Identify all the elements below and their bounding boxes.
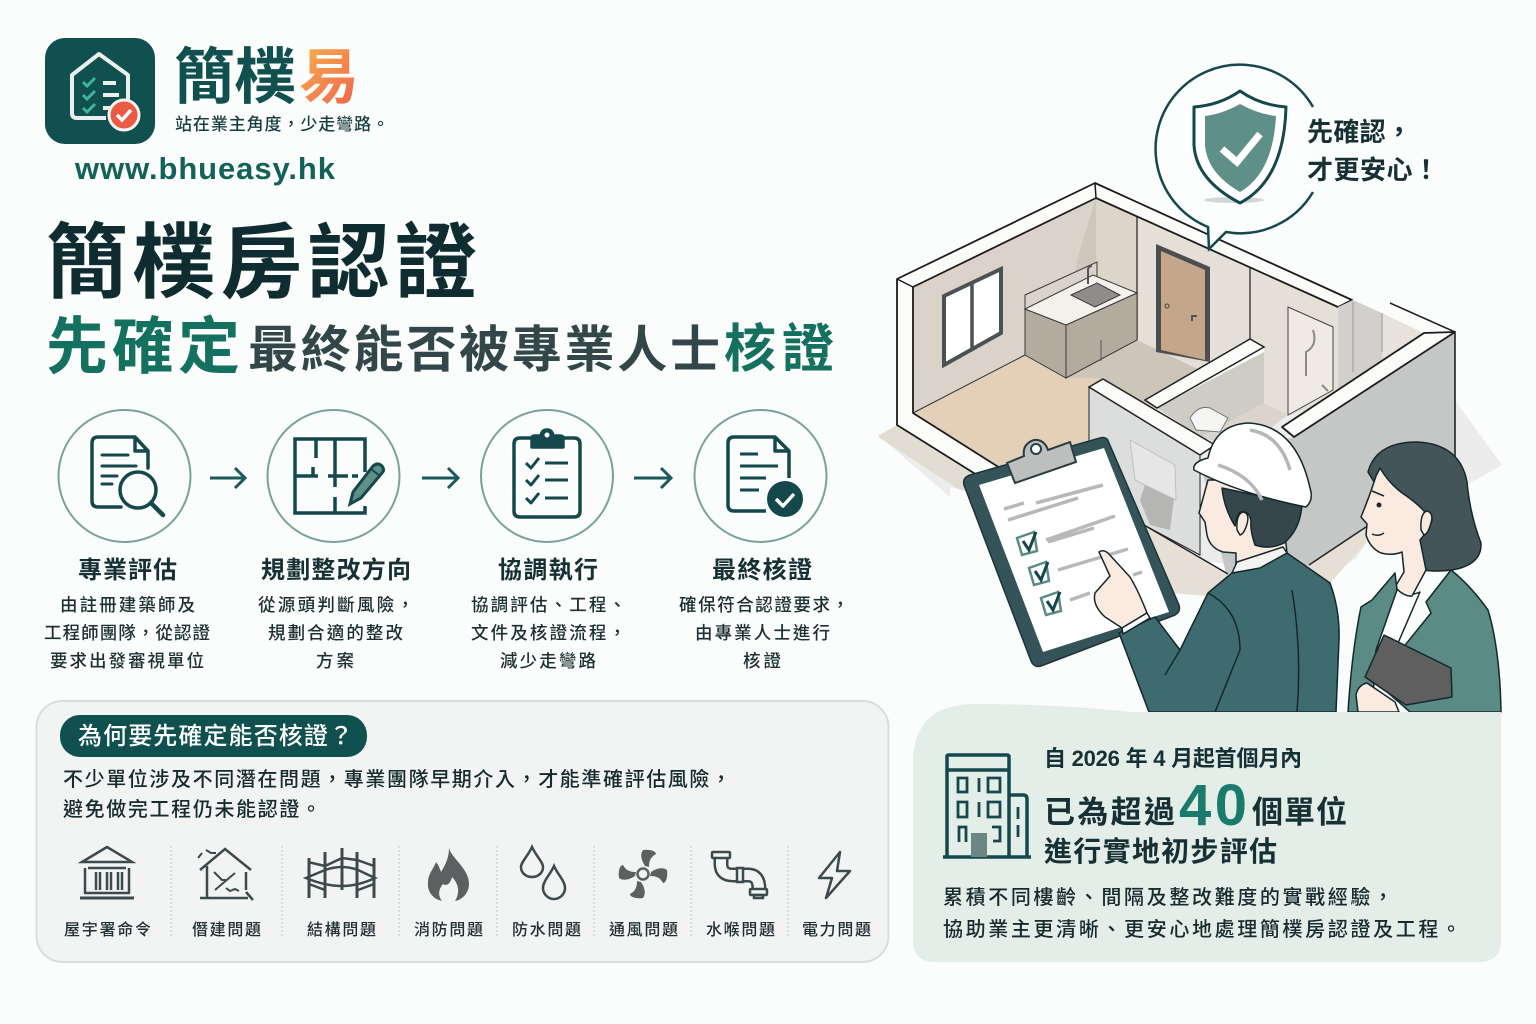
stat lead line: 自 2026 年 4 月起首個月內 <box>1044 746 1302 771</box>
step description: 方案 <box>316 651 354 671</box>
subtitle <box>46 313 834 382</box>
issue: fire <box>414 848 483 939</box>
bathroom partition wall <box>1145 339 1288 450</box>
icon: document with magnifier <box>58 410 190 542</box>
bathroom shower panel <box>1288 307 1333 415</box>
issue: plumbing <box>706 852 775 939</box>
stat headline: 已為超過 <box>1044 795 1175 830</box>
issue: structural <box>306 848 376 939</box>
wall cap <box>897 183 1352 480</box>
suit <box>1119 553 1339 712</box>
step heading: 協調執行 <box>498 557 598 584</box>
checkboxes <box>1017 532 1061 615</box>
bubble text <box>1307 117 1439 185</box>
issue: buildings department order <box>64 847 151 939</box>
issue: ventilation <box>609 850 678 939</box>
step description: 從源頭判斷風險， <box>258 595 414 615</box>
isometric room <box>878 183 1455 600</box>
bubble text: 先確認， <box>1307 117 1412 147</box>
step 4: final verification <box>679 410 849 671</box>
white shirt <box>1376 587 1420 670</box>
wordmark: 簡樸 <box>174 43 296 111</box>
neck and face <box>1199 480 1287 565</box>
icon: shield check <box>1194 91 1286 203</box>
step description: 協調評估、工程、 <box>471 595 626 615</box>
white foreground fade <box>950 465 1502 712</box>
step description: 減少走彎路 <box>500 651 596 671</box>
step description: 規劃合適的整改 <box>268 623 404 643</box>
panel body text: 避免做完工程仍未能認證。 <box>63 798 321 821</box>
icon: floor plan with pencil <box>268 410 400 542</box>
panel body text: 不少單位涉及不同潛在問題，專業團隊早期介入，才能準確評估風險， <box>63 768 731 791</box>
issue: illegal structures: 僭建問題 <box>192 921 261 939</box>
window <box>944 269 1001 365</box>
door <box>1156 244 1210 362</box>
side rooms <box>1338 300 1424 395</box>
hair <box>1368 442 1481 571</box>
wordmark: 易 <box>299 44 359 111</box>
face <box>1361 468 1432 596</box>
woman colleague <box>1348 442 1501 712</box>
hand pointing <box>1094 551 1147 628</box>
step description: 工程師團隊，從認證 <box>44 623 210 643</box>
illustration: isometric flat and professionals <box>878 65 1502 712</box>
tablet <box>1365 635 1452 705</box>
issue: structural: 結構問題 <box>307 921 376 939</box>
panel: why verify first <box>36 701 888 962</box>
hard hat <box>1194 423 1311 507</box>
panel body text: 協助業主更清晰、更安心地處理簡樸房認證及工程。 <box>943 918 1461 941</box>
panel: track record <box>913 704 1501 962</box>
issue: electrical: 電力問題 <box>802 921 871 939</box>
issue: plumbing: 水喉問題 <box>706 921 775 939</box>
logo: brand header <box>45 38 389 186</box>
step description <box>44 595 210 671</box>
arrow <box>634 468 671 488</box>
speech bubble <box>1156 65 1439 249</box>
step heading: 最終核證 <box>712 557 812 584</box>
step description <box>679 595 849 671</box>
subtitle: 最終能否被專業人士 <box>248 322 720 378</box>
stat headline: 40 <box>1179 773 1247 838</box>
hand <box>1356 683 1399 712</box>
icon: document with check <box>694 410 826 542</box>
arrow <box>210 468 245 488</box>
arrow <box>422 468 458 488</box>
right back walls <box>1096 198 1338 415</box>
panel body text: 累積不同樓齡、間隔及整改難度的實戰經驗， <box>943 885 1393 909</box>
subtitle: 核證 <box>724 321 834 379</box>
step description: 確保符合認證要求， <box>679 595 849 615</box>
step description: 由註冊建築師及 <box>60 595 195 615</box>
stat follow line: 進行實地初步評估 <box>1044 836 1277 867</box>
step description <box>258 595 414 671</box>
website: www.bhueasy.hk <box>74 151 336 186</box>
step description: 文件及核證流程， <box>471 623 626 643</box>
issue: fire: 消防問題 <box>414 921 483 939</box>
issue: buildings department order: 屋宇署命令 <box>64 920 151 939</box>
step description <box>471 595 626 671</box>
issue: waterproofing <box>512 847 581 939</box>
step 1: professional assessment <box>44 410 210 671</box>
icon: app logo <box>45 38 155 144</box>
left back wall <box>913 198 1096 413</box>
tagline: 站在業主角度，少走彎路。 <box>175 115 389 134</box>
wordmark <box>174 43 359 111</box>
man in hard hat <box>1094 423 1339 712</box>
panel heading pill: 為何要先確定能否核證？ <box>78 723 353 750</box>
step heading: 專業評估 <box>78 557 177 584</box>
panel body text <box>63 768 731 821</box>
title: 簡樸房認證 <box>46 218 477 309</box>
stat headline <box>1044 773 1347 838</box>
step 2: renovation planning <box>258 410 414 671</box>
stat headline: 個單位 <box>1252 795 1347 830</box>
bubble text: 才更安心！ <box>1307 155 1439 185</box>
panel body text <box>943 885 1461 941</box>
panel heading pill <box>60 715 367 757</box>
front right wall <box>1140 303 1455 600</box>
icon: building <box>943 755 1031 857</box>
step heading: 規劃整改方向 <box>261 556 411 584</box>
subtitle: 先確定 <box>46 313 240 382</box>
hair <box>1222 488 1302 547</box>
kitchen cabinet and sink <box>1025 262 1137 378</box>
step description: 核證 <box>743 651 782 671</box>
step description: 要求出發審視單位 <box>50 651 204 671</box>
base of walls <box>878 425 1040 520</box>
issue: electrical <box>802 852 871 939</box>
floor <box>913 340 1210 500</box>
front partition wall <box>1089 379 1215 555</box>
ground shadow <box>878 400 1502 575</box>
icon: clipboard checklist <box>481 410 613 542</box>
step 3: coordination <box>471 410 626 671</box>
issue: ventilation: 通風問題 <box>609 921 678 939</box>
jacket <box>1348 573 1397 712</box>
step description: 由專業人士進行 <box>695 623 830 643</box>
clipboard <box>964 438 1180 666</box>
issue: illegal structures <box>192 849 261 939</box>
issue: waterproofing: 防水問題 <box>512 921 581 939</box>
